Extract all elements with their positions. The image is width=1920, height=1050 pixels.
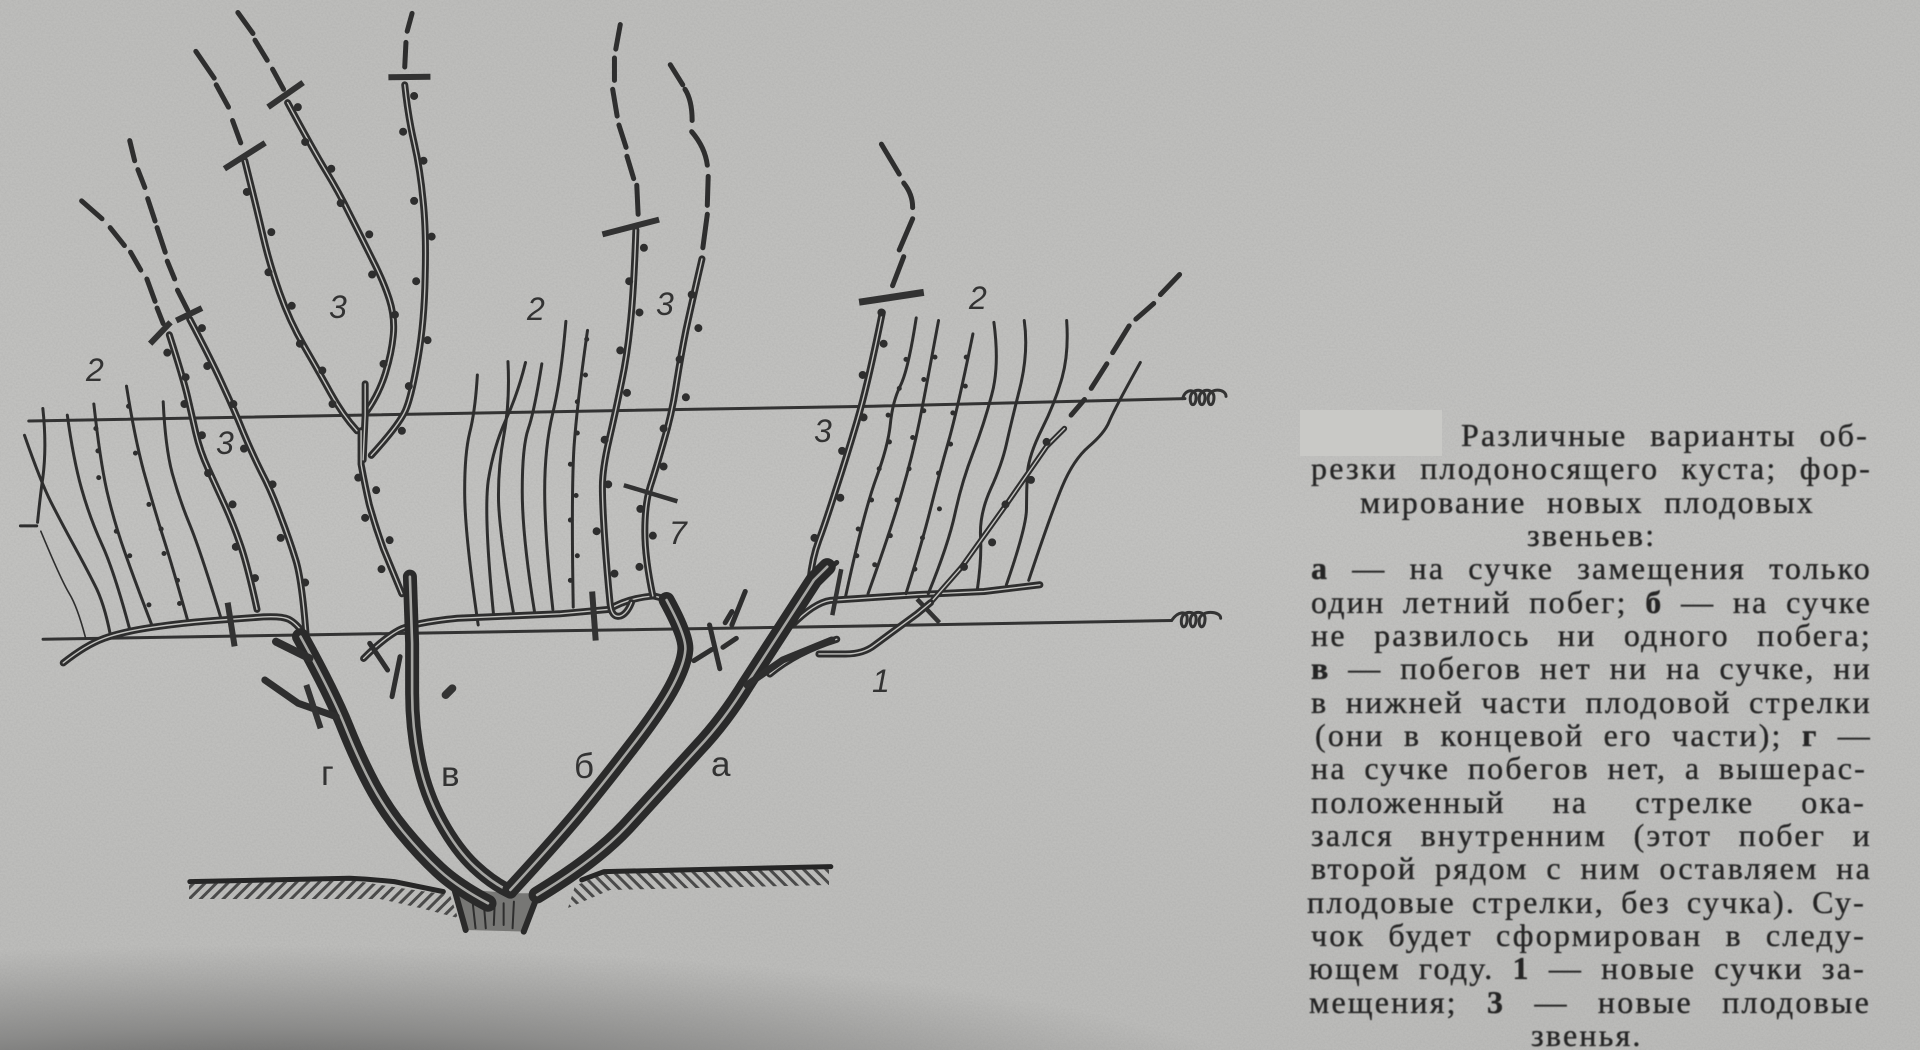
caption text block: ющем году. 1 — новые сучки за-: [1309, 950, 1866, 986]
central upper shoot: [361, 384, 402, 594]
caption text block: чок будет сформирован в следу-: [1311, 917, 1866, 953]
ground surface, left: [190, 878, 443, 892]
number labels: 2: [968, 280, 987, 316]
dashed continuation F: [613, 25, 638, 214]
renewal shoot 1: [770, 603, 931, 674]
number labels: 3: [814, 413, 832, 449]
dashed continuation E: [405, 13, 412, 67]
caption text block: зался внутренним (этот побег и: [1311, 817, 1872, 853]
caption text block: (они в концевой его части); г —: [1315, 717, 1872, 753]
fruiting arm, left: [63, 617, 304, 663]
caption text block: на сучке побегов нет, а вышерас-: [1311, 750, 1867, 786]
number labels: 2: [526, 291, 545, 327]
buds on right canes: [814, 312, 1047, 567]
soil hatching, right: [568, 869, 829, 908]
caption text block: резки плодоносящего куста; фор-: [1311, 450, 1872, 486]
trunk в: [410, 577, 510, 892]
ground surface, right: [582, 867, 831, 880]
caption text block: а — на сучке замещения только: [1311, 550, 1872, 586]
caption text block: Различные варианты об-: [1461, 417, 1869, 453]
caption text block: звеньев:: [1527, 517, 1656, 553]
caption text block: положенный на стрелке ока-: [1311, 784, 1866, 820]
dashed continuation 2: [130, 141, 188, 310]
number labels: 3: [329, 289, 347, 325]
centre and right shoots: [364, 25, 1180, 674]
trunk г: [301, 637, 488, 903]
dashed continuation C: [196, 51, 241, 143]
cane D with cut: [288, 103, 394, 411]
spur г lower: [265, 680, 336, 717]
part labels: б: [574, 747, 594, 786]
spur г upper: [276, 642, 309, 658]
dashed continuation G: [670, 65, 708, 248]
left group of shoots: [20, 12, 588, 663]
dashed continuation, upper right: [1071, 275, 1180, 415]
lower trellis wire: [43, 612, 1221, 639]
thin summer shoots, left: [20, 386, 220, 638]
cane C with cut: [245, 161, 357, 431]
number labels: 7: [669, 515, 688, 551]
cut mark, right: [859, 292, 924, 302]
long double cane to the upper right: [931, 429, 1064, 603]
buds on centre canes: [597, 248, 698, 574]
trunk а: [537, 567, 827, 895]
cut mark G: [624, 485, 677, 501]
cut mark г: [306, 685, 321, 728]
main trunks from the head: [190, 567, 832, 932]
stub near в: [446, 688, 452, 695]
part labels: [321, 745, 731, 794]
small spurs near arm a: [694, 562, 837, 669]
trunk б: [510, 600, 685, 890]
dashed continuation D: [238, 12, 284, 89]
left cane with cut mark: [169, 335, 257, 609]
caption text block: мирование новых плодовых: [1360, 484, 1815, 520]
caption text block: в — побегов нет ни на сучке, ни: [1311, 650, 1872, 686]
cut mark E: [388, 74, 430, 80]
spur в: [370, 643, 400, 697]
dashed continuation 1: [82, 201, 163, 324]
thin summer shoots, right: [846, 318, 1140, 596]
number labels: 3: [216, 425, 234, 461]
vine diagram: [20, 12, 1226, 932]
fruiting arm, right: [792, 585, 1040, 625]
caption text block: второй рядом с ним оставляем на: [1311, 850, 1872, 886]
number labels: 2: [85, 352, 104, 388]
soil hatching, left: [189, 880, 458, 918]
caption text block: мещения; 3 — новые плодовые: [1309, 984, 1871, 1020]
cut mark 2: [176, 308, 202, 321]
renewal branch of а: [747, 640, 832, 685]
cane G with cut: [645, 259, 702, 596]
upper trellis wire: [29, 390, 1226, 421]
caption text block: плодовые стрелки, без сучка). Су-: [1307, 884, 1866, 920]
arm cut mark: [228, 603, 235, 646]
arm cut mark, centre: [592, 591, 596, 641]
caption text block: не развилось ни одного побега;: [1311, 617, 1872, 653]
cut mark C: [224, 143, 265, 169]
cut mark D: [268, 83, 303, 107]
part labels: в: [441, 755, 460, 794]
cane F with cut: [602, 230, 636, 616]
thin summer shoots, centre: [465, 321, 588, 625]
caption text block: один летний побег; б — на сучке: [1311, 584, 1872, 620]
arm cut marks, right: [832, 569, 939, 623]
number labels: 1: [872, 663, 890, 699]
cane E with cut: [371, 85, 425, 455]
part labels: г: [321, 754, 334, 793]
right cane with cut: [810, 312, 882, 580]
cut mark F: [602, 220, 659, 234]
part labels: а: [711, 745, 731, 784]
number labels: 3: [656, 286, 674, 322]
fruiting arm, centre: [364, 596, 672, 658]
dashed continuation, right: [881, 144, 913, 286]
root stock: [452, 888, 542, 932]
number labels: [85, 280, 987, 699]
buds on left canes: [167, 96, 432, 583]
caption text block: в нижней части плодовой стрелки: [1311, 684, 1872, 720]
cut mark 1: [150, 322, 171, 344]
second left cane: [190, 319, 306, 634]
